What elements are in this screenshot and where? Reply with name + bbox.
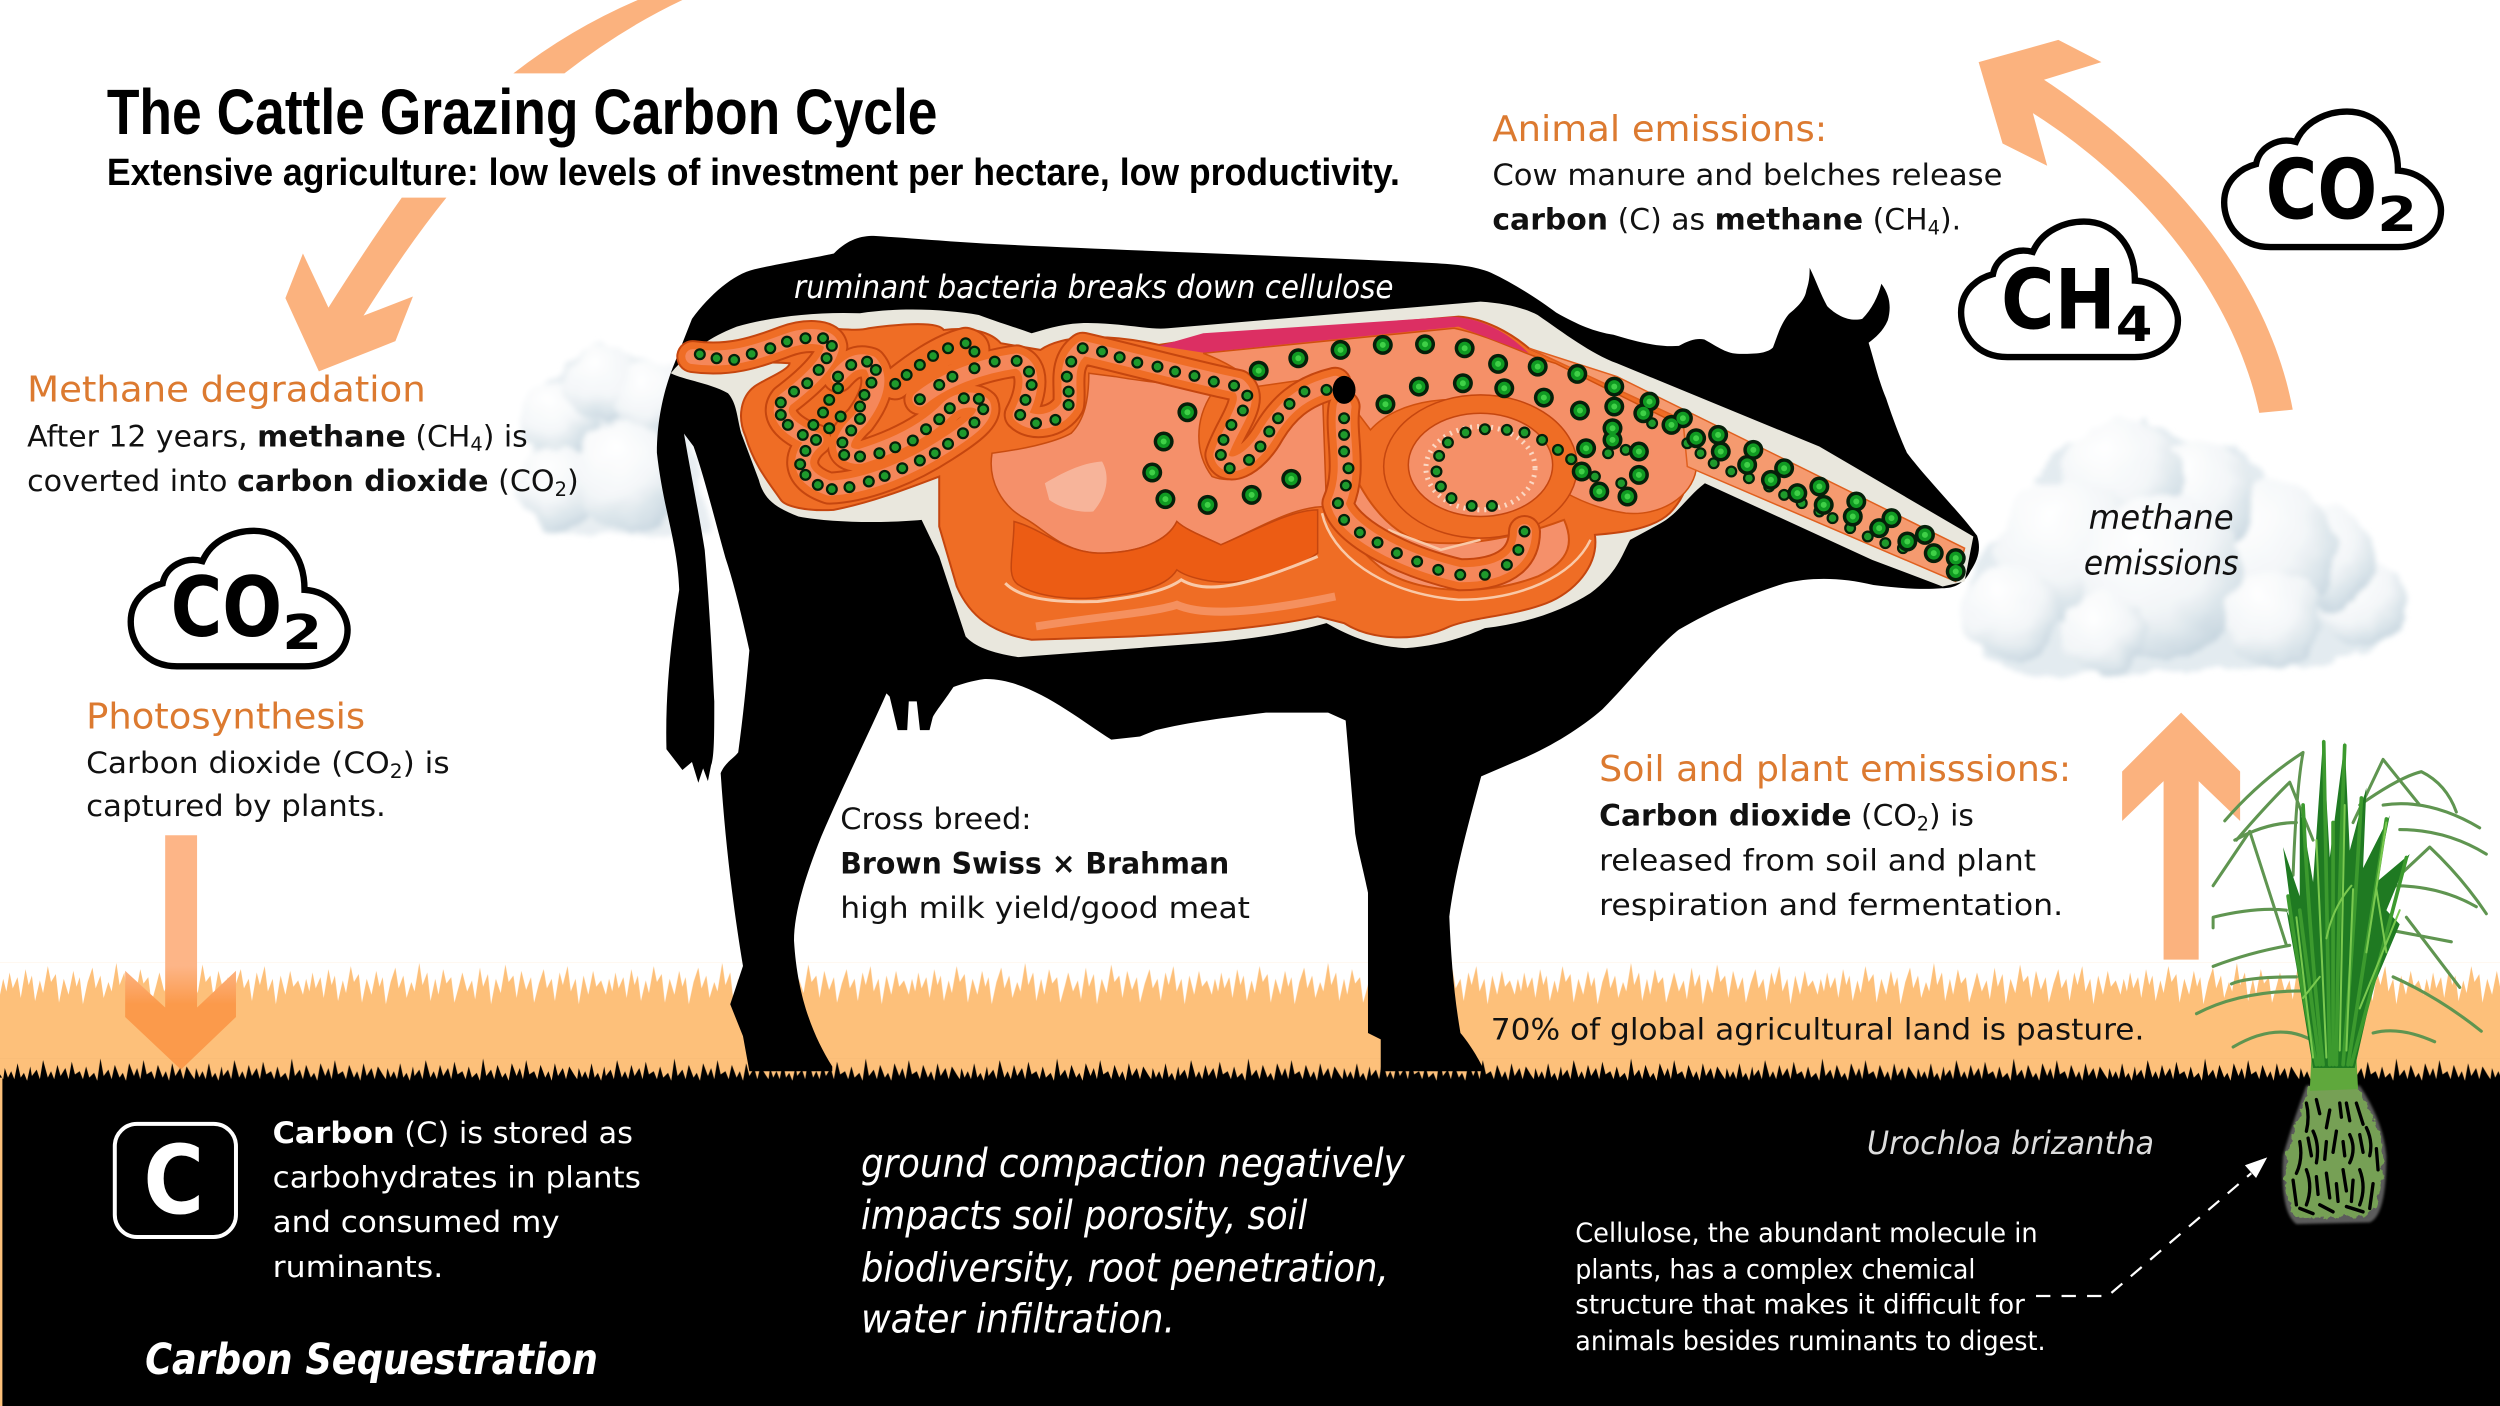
cow silhouette: [657, 236, 1979, 1071]
icon: CH4 cloud: CH: [2001, 251, 2116, 348]
text block: soil and plant emissions: Soil and plant emisssions:: [1599, 749, 2071, 790]
text block: photosynthesis: ) is: [403, 746, 450, 780]
text block: soil and plant emissions: released from soil and plant: [1599, 843, 2036, 877]
text block: ground compaction: impacts soil porosity, soil: [861, 1193, 1307, 1239]
text block: ground compaction: [861, 1141, 1406, 1343]
dense leaf fan: [2283, 738, 2410, 1068]
text block: ground compaction: water infiltration.: [861, 1297, 1175, 1343]
digestive system panel: [671, 302, 1973, 657]
esophagus: [1529, 348, 1965, 581]
text block: carbon storage: Carbon (C) is stored as: [273, 1116, 633, 1150]
icon: carbon box: [115, 1124, 236, 1237]
root glow: [2283, 1086, 2386, 1224]
stomach and intestine body: [684, 317, 1691, 640]
label: ruminant bacteria: ruminant bacteria breaks down cellulose: [794, 268, 1393, 306]
rumen highlight: [1045, 462, 1107, 512]
illustration: Urochloa brizantha grass plant: [2196, 738, 2486, 1224]
text block: cellulose: structure that makes it difficult for: [1575, 1291, 2025, 1321]
text block: animal emissions: 4: [1928, 216, 1940, 239]
arrow: toward methane degradation: [285, 198, 446, 371]
icon: carbon box: C: [143, 1124, 204, 1236]
black spot: [1333, 376, 1356, 404]
text block: ground compaction: ground compaction negatively: [861, 1141, 1406, 1187]
text block: cross breed: high milk yield/good meat: [840, 891, 1250, 925]
roots: [2286, 1086, 2383, 1219]
text block: methane degradation: ): [567, 464, 579, 498]
icon: CO2 cloud left: [131, 531, 348, 666]
label: methane emissions: emissions: [2084, 544, 2239, 583]
text block: methane degradation: coverted into carbon dioxide (CO: [27, 464, 553, 498]
text block: soil and plant emissions: ) is: [1929, 799, 1974, 833]
thin drooping leaves: [2196, 752, 2486, 1051]
text block: ground compaction: biodiversity, root penetration,: [861, 1246, 1389, 1292]
ground: [0, 1058, 2500, 1406]
icon: CH4 cloud: 4: [2116, 298, 2152, 353]
text block: photosynthesis: Carbon dioxide (CO: [86, 746, 373, 780]
text block: photosynthesis: Photosynthesis: [86, 697, 365, 738]
stomach lining: [1005, 556, 1318, 602]
text block: photosynthesis: [86, 697, 450, 823]
icon: CH4 cloud: [1961, 222, 2178, 357]
text block: cellulose: [1575, 1219, 2046, 1357]
highlight leaves: [2296, 805, 2400, 1058]
text block: methane degradation: 4: [470, 433, 483, 456]
label: methane emissions: [2084, 498, 2239, 583]
title: The Cattle Grazing Carbon Cycle: [107, 76, 938, 148]
mid-green leaves: [2288, 742, 2406, 1065]
grass band: [0, 963, 2500, 1081]
text: pasture fact: 70% of global agricultural land is pasture.: [1491, 1012, 2144, 1046]
text block: soil and plant emissions: Carbon dioxide (CO: [1599, 799, 1916, 833]
intestine tubes: [693, 337, 1524, 575]
text block: carbon storage: [273, 1116, 641, 1284]
text block: methane degradation: Methane degradation: [27, 370, 426, 411]
text block: photosynthesis: captured by plants.: [86, 789, 386, 823]
subtitle: Extensive agriculture: low levels of investment per hectare, low productivity.: [107, 151, 1400, 194]
text block: soil and plant emissions: 2: [1917, 813, 1929, 836]
text block: carbon storage: and consumed my: [273, 1205, 560, 1239]
arrow: soil emissions up: [2122, 713, 2240, 960]
text block: carbon storage: ruminants.: [273, 1250, 443, 1284]
cloud: methane degradation: [517, 341, 710, 534]
large bacteria dots: [1152, 344, 1956, 571]
label: Urochloa brizantha: Urochloa brizantha: [1867, 1124, 2154, 1162]
text block: methane degradation: [27, 370, 579, 501]
text block: animal emissions: [1492, 109, 2003, 239]
heading: carbon sequestration: Carbon Sequestration: [145, 1335, 598, 1385]
icon: CO2 cloud left: CO: [171, 559, 282, 656]
rumen dark lobes: [1011, 510, 1318, 598]
pink strip: [1159, 317, 1529, 353]
text block: methane degradation: ) is: [483, 419, 528, 453]
arrow: top arc segment: [513, 0, 682, 73]
text block: soil and plant emissions: respiration and fermentation.: [1599, 888, 2063, 922]
stem neck: [2310, 1058, 2358, 1091]
abomasum folds: [1322, 513, 1590, 600]
arrow: rising to atmosphere: [1979, 40, 2293, 413]
label: methane emissions: methane: [2089, 498, 2234, 537]
text block: carbon storage: carbohydrates in plants: [273, 1161, 641, 1195]
icon: CO2 cloud left: 2: [282, 606, 322, 661]
text block: cellulose: Cellulose, the abundant molecule in: [1575, 1219, 2038, 1249]
reticulum ring: [1384, 395, 1577, 538]
root gaps: [2293, 1100, 2378, 1214]
small bacteria dots: [700, 338, 1903, 575]
text block: methane degradation: After 12 years, methane (CH: [27, 419, 469, 453]
text block: cross breed: Brown Swiss × Brahman: [840, 847, 1229, 881]
cloud: methane emissions: [1964, 418, 2406, 677]
text block: cross breed: [840, 802, 1250, 925]
text block: animal emissions: Animal emissions:: [1492, 109, 1827, 150]
text block: methane degradation: 2: [555, 478, 567, 501]
icon: CO2 cloud right: 2: [2377, 188, 2417, 243]
upper stomach chamber: [1203, 328, 1696, 514]
text block: animal emissions: Cow manure and belches release: [1492, 158, 2003, 192]
text block: soil and plant emissions: [1599, 749, 2071, 922]
rumen salmon chamber: [991, 373, 1326, 553]
text block: animal emissions: carbon (C) as methane (CH: [1492, 203, 1927, 237]
icon: CO2 cloud right: CO: [2266, 141, 2377, 238]
icon: CO2 cloud right: [2224, 112, 2441, 247]
cream border: [671, 302, 1973, 657]
text block: photosynthesis: 2: [390, 760, 403, 783]
arrow: carbon down to soil: [125, 835, 236, 1070]
text block: cellulose: plants, has a complex chemical: [1575, 1255, 1975, 1285]
text block: cross breed: Cross breed:: [840, 802, 1032, 836]
abomasum lower chamber: [1332, 433, 1569, 590]
text block: cellulose: animals besides ruminants to digest.: [1575, 1327, 2046, 1357]
lower lining band: [1036, 596, 1335, 626]
arrow: dashed cellulose pointer: [2036, 1157, 2267, 1296]
text block: animal emissions: ).: [1940, 203, 1961, 237]
